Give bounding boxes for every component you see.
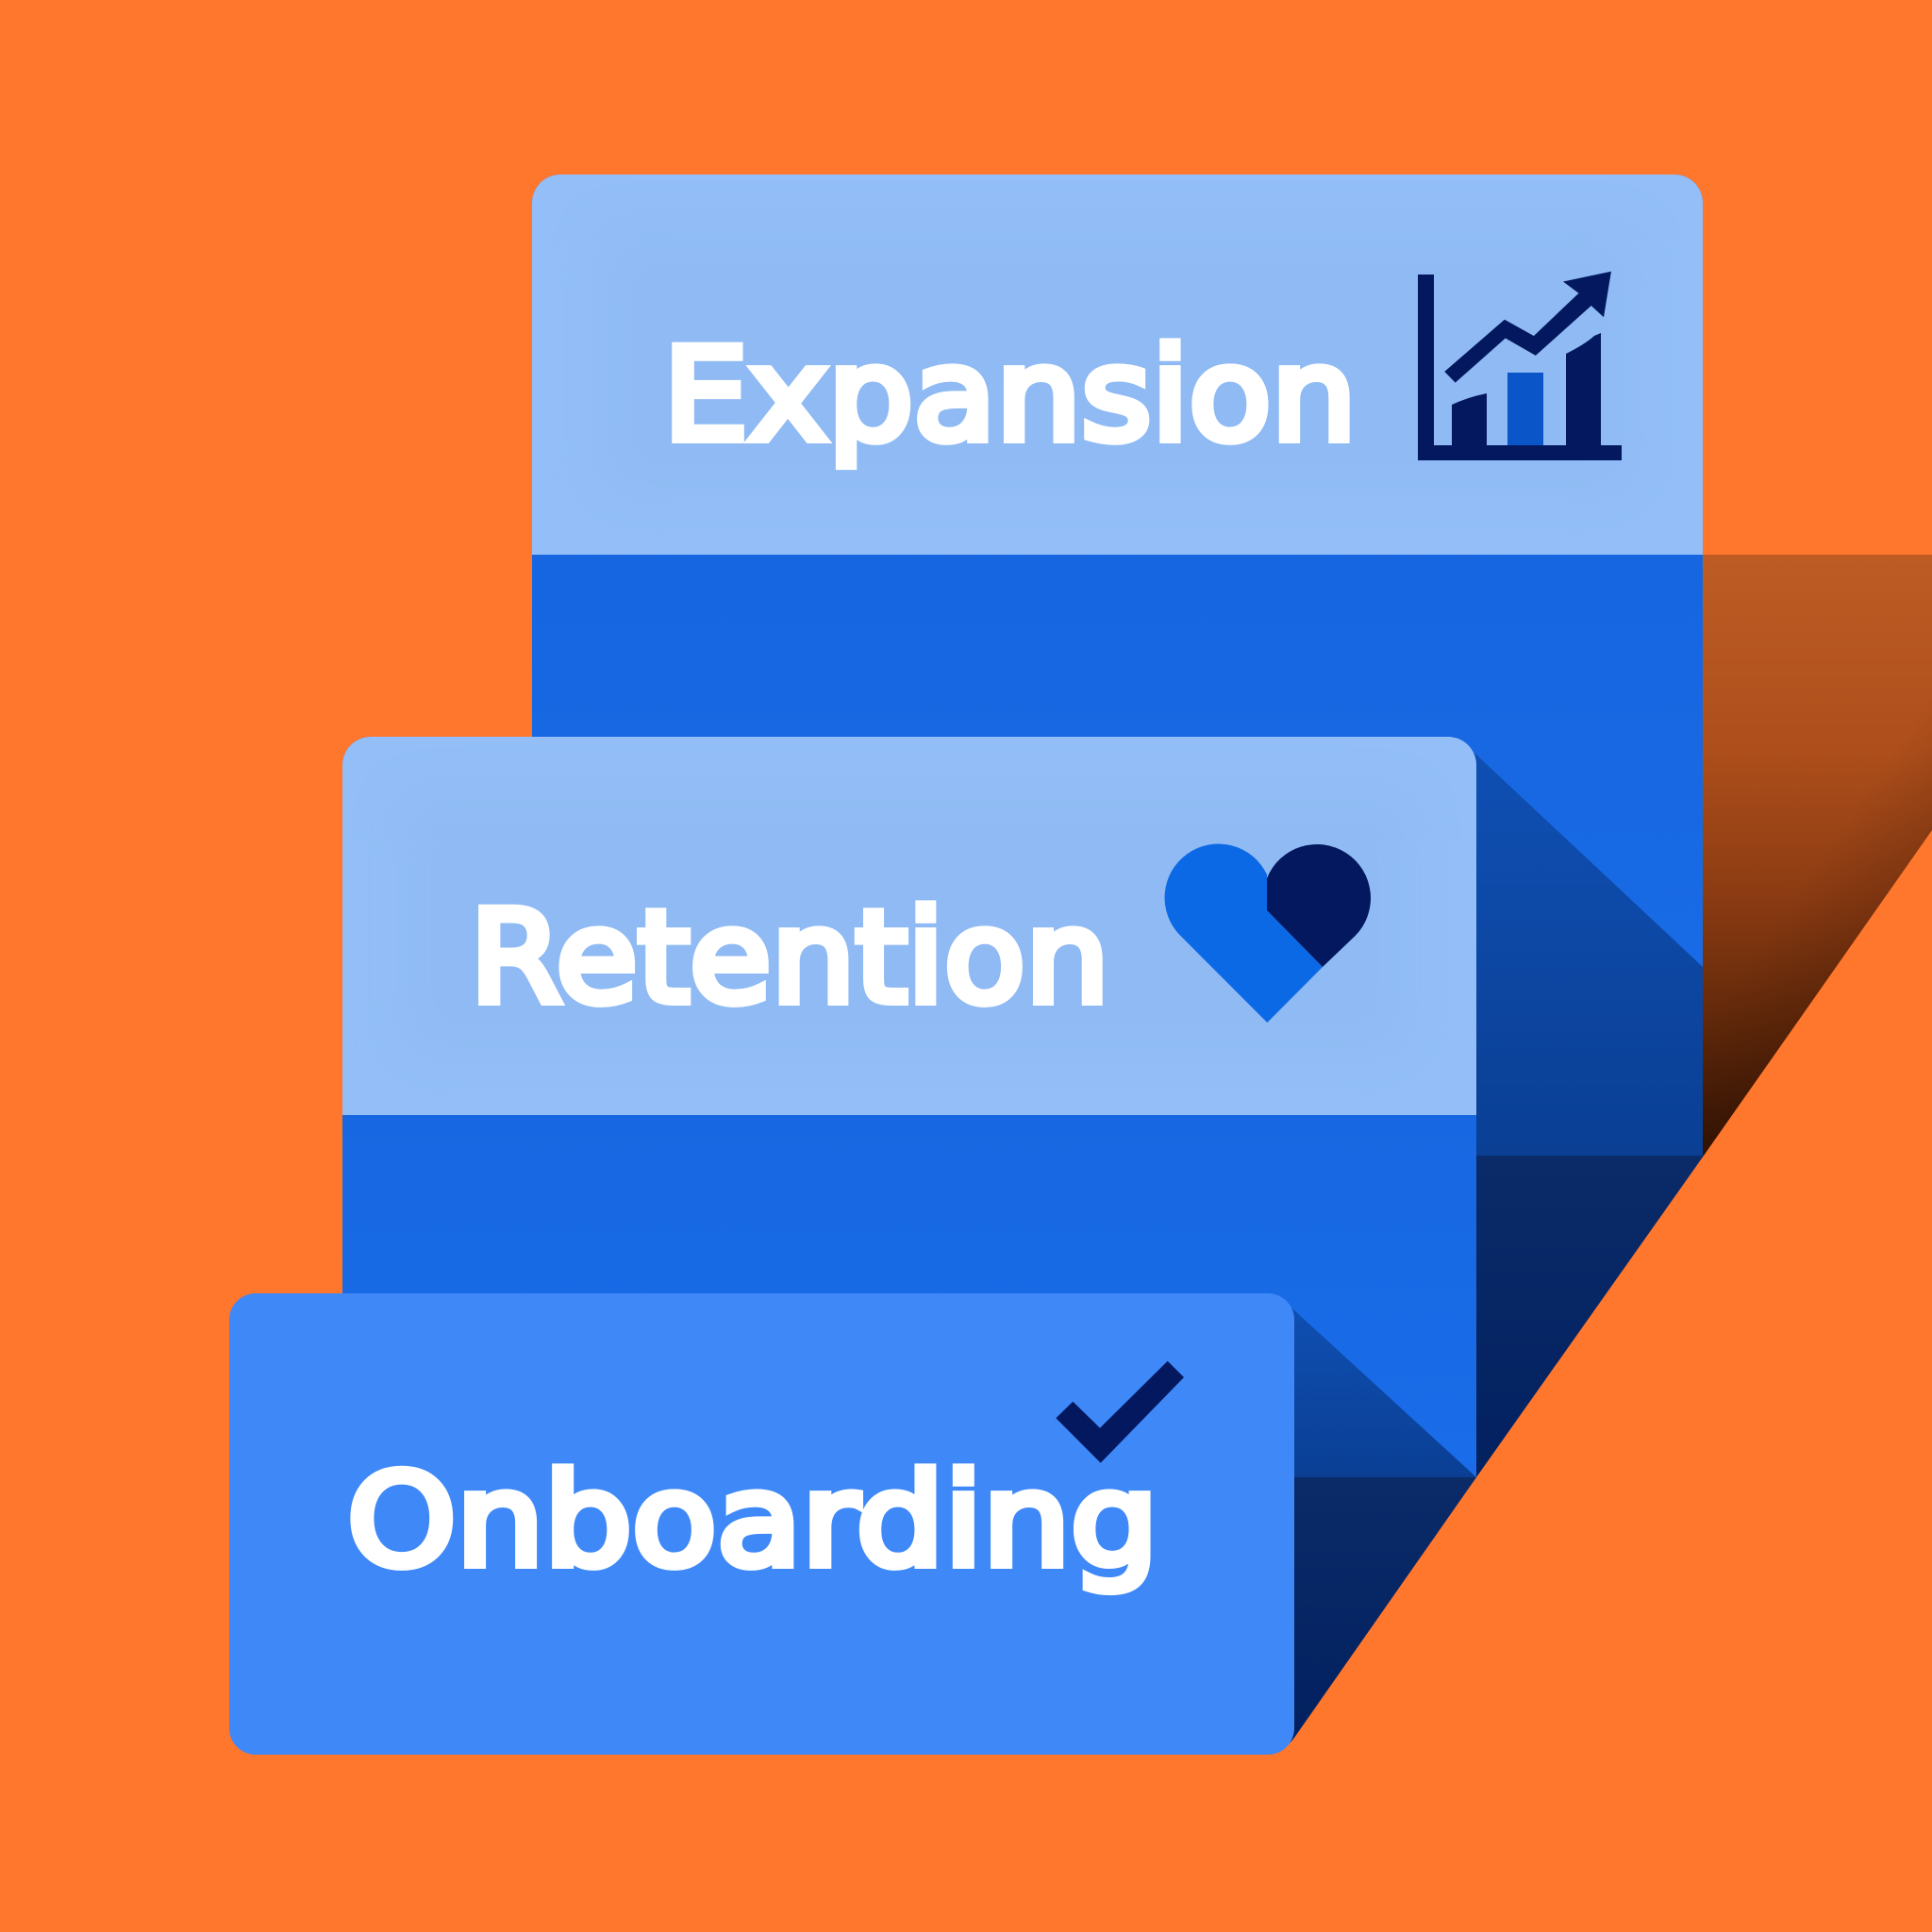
panel: expansion card xyxy=(532,175,1703,967)
onboarding label: Onboarding xyxy=(347,1447,1158,1594)
icon: growth chart xyxy=(1418,273,1622,460)
panel: retention card xyxy=(342,737,1476,1481)
retention card body xyxy=(342,737,1476,1481)
panel: onboarding card xyxy=(229,1293,1294,1755)
shadow: deep fold below expansion card xyxy=(1453,1156,1704,1509)
cast shadow on background xyxy=(1703,555,1932,1156)
expansion card header xyxy=(532,175,1703,555)
icon: heart xyxy=(1165,844,1371,1023)
onboarding card body xyxy=(229,1293,1294,1755)
shadow: deep fold below retention card xyxy=(1269,1477,1476,1754)
expansion card body xyxy=(532,175,1703,1170)
expansion label: Expansion xyxy=(663,321,1357,470)
retention card header xyxy=(342,737,1476,1115)
shadow: retention card onto expansion card xyxy=(1453,736,1703,1156)
shadow: onboarding card onto retention card xyxy=(1274,1294,1476,1477)
icon: check mark xyxy=(1056,1361,1184,1463)
retention label: Retention xyxy=(470,883,1109,1032)
